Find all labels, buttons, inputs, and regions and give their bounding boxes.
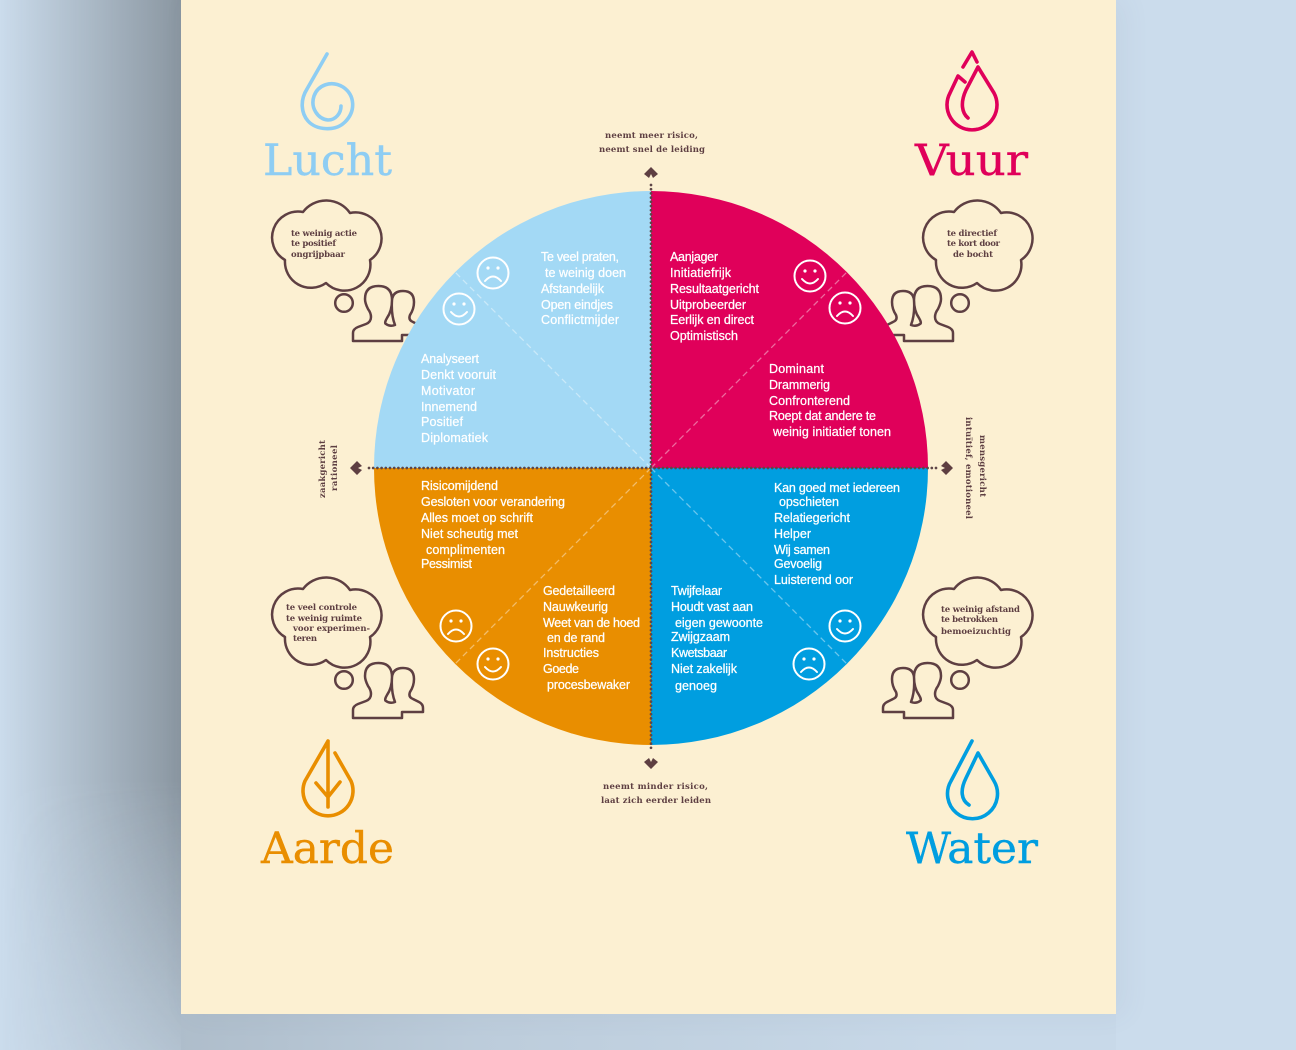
cloud outline <box>272 577 382 668</box>
axis label: right: mensgericht <box>977 435 987 497</box>
icon: sad face <box>830 292 860 324</box>
text: Lucht negative traits: Te veel praten, <box>541 250 619 264</box>
text: Water negative traits: Niet zakelijk <box>671 662 738 676</box>
cloud text: te kort door <box>947 239 1001 249</box>
text: Aarde positive traits: procesbewaker <box>547 678 630 692</box>
icon: happy face <box>478 648 508 680</box>
icon: people <box>883 286 953 341</box>
quadrant: Water <box>651 468 928 745</box>
icon: happy face <box>794 260 826 292</box>
icon: air swirl <box>302 54 353 129</box>
icon: sad face <box>478 258 508 288</box>
text: Vuur positive traits: Aanjager <box>670 250 718 264</box>
cloud outline <box>272 200 382 291</box>
text: Vuur positive traits: Initiatiefrijk <box>670 266 732 280</box>
text: Aarde positive traits: Weet van de hoed <box>543 616 640 630</box>
quadrant: Aarde <box>374 468 651 745</box>
text: Vuur negative traits <box>769 362 891 439</box>
text: Vuur positive traits <box>670 250 760 343</box>
axis label: top <box>599 131 705 155</box>
text: Lucht positive traits: Positief <box>421 415 464 429</box>
icon: people <box>883 663 953 718</box>
cloud text <box>947 229 1001 260</box>
axis label: left: zaakgericht <box>318 440 328 498</box>
text: Lucht positive traits: Innemend <box>421 400 477 414</box>
quadrant: Lucht <box>374 191 651 468</box>
axis label: bottom <box>601 782 711 806</box>
text: Lucht positive traits <box>421 352 497 445</box>
text: Lucht negative traits: te weinig doen <box>545 266 626 280</box>
thought: Water <box>883 577 1033 718</box>
arrow: left <box>350 461 362 475</box>
text: Aarde negative traits: Risicomijdend <box>421 479 498 493</box>
text: Lucht negative traits: Conflictmijder <box>541 313 619 327</box>
text: Water positive traits: Luisterend oor <box>774 573 853 587</box>
arrow: down <box>644 758 658 769</box>
icon: water drop <box>948 741 998 819</box>
panel: Aarde header <box>260 741 394 874</box>
text: Vuur positive traits: Eerlijk en direct <box>670 313 755 327</box>
panel: Vuur header <box>914 52 1028 186</box>
cloud text: te weinig ruimte <box>286 614 363 624</box>
smileys: Lucht <box>444 258 508 324</box>
cloud text: bemoeizuchtig <box>941 627 1011 637</box>
cloud text: ongrijpbaar <box>291 250 346 260</box>
arrow: up <box>644 167 658 178</box>
text: Water positive traits: Helper <box>774 527 811 541</box>
panel: Lucht header <box>263 54 392 186</box>
icon: people <box>353 286 423 341</box>
thought bubble dot <box>335 294 353 312</box>
text: Water negative traits: Kwetsbaar <box>671 646 727 660</box>
text: Lucht positive traits: Denkt vooruit <box>421 368 497 382</box>
axis label: left <box>318 440 340 498</box>
thought: Lucht <box>272 200 423 341</box>
cloud text: de bocht <box>953 250 993 260</box>
text: Vuur negative traits: Dominant <box>769 362 825 376</box>
poster sheet <box>181 0 1116 1014</box>
text: Aarde positive traits <box>543 584 640 692</box>
text: Aarde negative traits: Pessimist <box>421 557 473 571</box>
text: Lucht positive traits: Analyseert <box>421 352 480 366</box>
text: Water positive traits: Wij samen <box>774 543 830 557</box>
thought bubble dot <box>951 671 969 689</box>
text: Vuur negative traits: Drammerig <box>769 378 830 392</box>
axis label: right: intuïtief, emotioneel <box>963 417 974 520</box>
text: Lucht positive traits: Diplomatiek <box>421 431 489 445</box>
heading: Water: Water <box>906 824 1038 874</box>
diagonal dashed dividers <box>455 272 847 664</box>
text: Vuur positive traits: Uitprobeerder <box>670 298 746 312</box>
icon: fire drop <box>947 52 997 130</box>
text: Water positive traits: Relatiegericht <box>774 511 851 525</box>
text: Water negative traits: Zwijgzaam <box>671 630 730 644</box>
text: Lucht negative traits: Afstandelijk <box>541 282 605 296</box>
cloud text <box>291 229 358 260</box>
text: Water positive traits: Kan goed met iedereen <box>774 481 900 495</box>
cloud text <box>286 603 370 644</box>
icon: sad face <box>440 610 472 642</box>
text: Aarde positive traits: Goede <box>543 662 579 676</box>
icon: happy face <box>444 294 474 324</box>
text: Water positive traits: opschieten <box>779 495 839 509</box>
text: Vuur negative traits: weinig initiatief tonen <box>772 425 891 439</box>
cloud text: voor experimen- <box>292 624 370 634</box>
text: Water negative traits: Houdt vast aan <box>671 600 753 614</box>
arrow: right <box>941 461 953 475</box>
text: Vuur positive traits: Resultaatgericht <box>670 282 760 296</box>
text: Water negative traits: Twijfelaar <box>671 584 722 598</box>
text: Lucht positive traits: Motivator <box>421 384 475 398</box>
text: Aarde negative traits: Niet scheutig met <box>421 527 519 541</box>
panel: Water header <box>906 741 1038 874</box>
text: Aarde positive traits: Instructies <box>543 646 599 660</box>
heading: Vuur: Vuur <box>914 136 1028 186</box>
text: Aarde positive traits: Nauwkeurig <box>543 600 608 614</box>
text: Water positive traits: Gevoelig <box>774 557 822 571</box>
axis label: bottom: neemt minder risico, <box>603 782 708 792</box>
cloud outline <box>923 200 1033 291</box>
text: Aarde positive traits: Gedetailleerd <box>543 584 615 598</box>
text: Water positive traits <box>774 481 900 587</box>
icon: happy face <box>830 610 860 642</box>
axis label: right <box>963 417 987 520</box>
cloud text: te directief <box>947 229 998 239</box>
quadrant: Vuur <box>651 191 928 468</box>
pie chart <box>350 167 953 769</box>
text: Aarde negative traits: Alles moet op schrift <box>421 511 534 525</box>
cloud text <box>941 605 1020 637</box>
smileys: Water <box>794 610 860 680</box>
cloud text: te positief <box>291 239 337 249</box>
text: Vuur negative traits: Confronterend <box>769 394 850 408</box>
icon: earth leaf <box>303 741 353 816</box>
axis label: left: rationeel <box>330 444 340 491</box>
text: Lucht negative traits <box>541 250 626 327</box>
heading: Lucht: Lucht <box>263 136 392 186</box>
cloud text: te weinig actie <box>291 229 358 239</box>
thought: Vuur <box>883 200 1033 341</box>
text: Aarde negative traits: complimenten <box>426 543 505 557</box>
cloud text: te betrokken <box>941 615 998 625</box>
cloud outline <box>923 577 1033 668</box>
cloud text: te weinig afstand <box>941 605 1020 615</box>
text: Vuur positive traits: Optimistisch <box>670 329 738 343</box>
text: Aarde positive traits: en de rand <box>547 631 605 645</box>
smileys: Vuur <box>794 260 860 324</box>
text: Vuur negative traits: Roept dat andere te <box>769 409 876 423</box>
text: Aarde negative traits: Gesloten voor verandering <box>421 495 565 509</box>
text: Lucht negative traits: Open eindjes <box>541 298 613 312</box>
axis label: bottom: laat zich eerder leiden <box>601 796 711 806</box>
heading: Aarde: Aarde <box>260 824 394 874</box>
text: Water negative traits: eigen gewoonte <box>675 616 763 630</box>
thought: Aarde <box>272 577 423 718</box>
icon: sad face <box>794 648 824 680</box>
text: Water negative traits: genoeg <box>675 679 717 693</box>
axis label: top: neemt snel de leiding <box>599 145 705 155</box>
axis label: top: neemt meer risico, <box>605 131 698 141</box>
smileys: Aarde <box>440 610 508 680</box>
cloud text: te veel controle <box>286 603 358 613</box>
text: Aarde negative traits <box>421 479 565 571</box>
cloud text: teren <box>293 634 317 644</box>
text: Water negative traits <box>671 584 763 693</box>
thought bubble dot <box>335 671 353 689</box>
icon: people <box>353 663 423 718</box>
dotted axes <box>369 185 939 751</box>
thought bubble dot <box>951 294 969 312</box>
